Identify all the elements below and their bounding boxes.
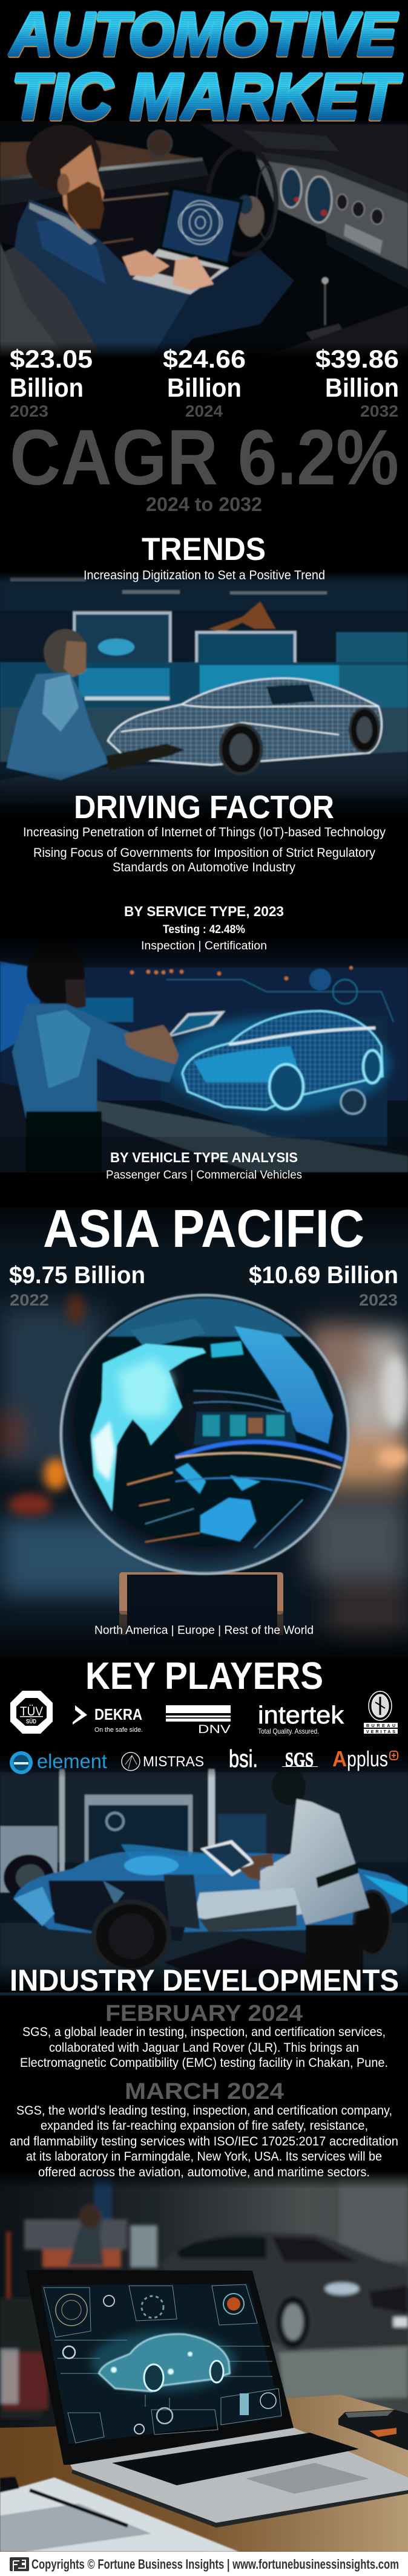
image: engineer with holographic car [0, 937, 408, 1173]
other regions: North America | Europe | Rest of the World [94, 1624, 314, 1637]
image: mechanic with laptop in car interior [0, 121, 408, 358]
image: engineer inspecting car chassis [0, 1754, 408, 1995]
floor [0, 1923, 408, 1995]
segment: by service type: BY SERVICE TYPE, 2023 [124, 903, 284, 919]
development: March 2024: expanded its far-reaching expansion of fire safety, resistance, [41, 2119, 368, 2133]
logo: MISTRAS: MISTRAS [143, 1754, 204, 1770]
stat: 2023 market size: $23.05 [10, 345, 93, 373]
development: February 2024: FEBRUARY 2024 [105, 2001, 303, 2026]
heading: trends: TRENDS [142, 532, 266, 567]
laptop [159, 186, 243, 268]
segment: by vehicle type: Passenger Cars | Commercial Vehicles [106, 1169, 302, 1182]
car wireframe [108, 678, 381, 765]
stand [119, 1572, 283, 1635]
logo: DNV [166, 1705, 231, 1736]
stat: 2023 market size: Billion [10, 373, 84, 403]
logo: intertek: Total Quality. Assured. [258, 1727, 319, 1735]
logo: TUV SUD: SÜD [26, 1717, 36, 1725]
title: TIC MARKET [12, 61, 401, 134]
logo: intertek: intertek [258, 1701, 344, 1729]
logos: key players [10, 1691, 398, 1774]
image: laptop with car diagnostics in workshop [0, 2171, 408, 2552]
stat: 2032 market size [315, 345, 399, 420]
laptop screen [26, 2270, 294, 2465]
stat: 2024 market size [163, 345, 246, 420]
title: TIC MARKET [12, 60, 402, 132]
segment: by vehicle type: BY VEHICLE TYPE ANALYSIS [110, 1150, 298, 1165]
development: March 2024: and flammability testing services with ISO/IEC 17025:2017 accreditation [10, 2135, 398, 2148]
man [272, 1769, 306, 1805]
paper and pen [0, 2477, 239, 2552]
stat: asia pacific 2023 [249, 1262, 398, 1309]
logo: DNV: DNV [198, 1723, 231, 1736]
desk [0, 1082, 408, 1173]
development: March 2024 [10, 2079, 398, 2179]
car on screen [91, 2331, 236, 2392]
segment: by service type: Testing : 42.48% [163, 923, 245, 936]
logo: DEKRA [73, 1705, 143, 1734]
development: March 2024: MARCH 2024 [125, 2079, 284, 2104]
stat: asia pacific 2022: 2022 [10, 1291, 49, 1309]
table [0, 2395, 408, 2552]
dashboard [256, 158, 408, 269]
logo: DEKRA: On the safe side. [94, 1726, 143, 1734]
man jacket [15, 200, 190, 358]
driving factor text: Rising Focus of Governments for Imposition of Strict Regulatory [33, 846, 375, 860]
development: February 2024: collaborated with Jaguar Land Rover (JLR). This brings an [49, 2041, 359, 2055]
development: February 2024 [20, 2001, 388, 2070]
title: TIC MARKET [12, 60, 402, 132]
stat: 2032 market size: 2032 [360, 402, 398, 420]
development: March 2024: SGS, the world's leading testing, inspection, and certification company, [16, 2104, 392, 2118]
logo: bsi: bsi. [229, 1746, 258, 1772]
logo: Applus: pplus [347, 1746, 388, 1771]
driving factor text: Increasing Penetration of Internet of Things (IoT)-based Technology [23, 825, 386, 839]
seat [4, 246, 100, 356]
image: engineer and wireframe car in lab [0, 571, 408, 819]
icon: Fortune Business Insights logo [10, 2557, 29, 2571]
stat: 2032 market size: $39.86 [315, 345, 399, 373]
car [13, 1852, 408, 1935]
heading: driving factor: DRIVING FACTOR [74, 789, 334, 825]
jeans [151, 250, 294, 358]
development: March 2024: at its laboratory in Farmingdale, New York, USA. Its services will be [26, 2150, 382, 2164]
logo: element: element [37, 1750, 107, 1772]
head [26, 125, 101, 192]
tablet [166, 1011, 225, 1038]
development: March 2024: offered across the aviation, automotive, and maritime sectors. [38, 2165, 370, 2179]
logo: MISTRAS [122, 1752, 204, 1771]
segment: by service type [124, 903, 284, 952]
stat: asia pacific 2022 [9, 1262, 145, 1309]
stat: 2032 market size: Billion [325, 373, 399, 403]
stat: 2024 market size: $24.66 [163, 345, 246, 373]
man [44, 629, 87, 675]
calculator [338, 2410, 408, 2450]
logo: Bureau Veritas [364, 1691, 398, 1734]
logo: element [10, 1750, 107, 1774]
car [160, 2231, 408, 2349]
stat: 2024 market size: Billion [167, 373, 242, 403]
globe [61, 1294, 349, 1574]
logo: Applus: A [332, 1746, 347, 1771]
title: AUTOMOTIVE [8, 0, 398, 68]
stat: 2024 market size: 2024 [185, 402, 223, 420]
steering wheel [208, 147, 276, 255]
title: AUTOMOTIVE [8, 0, 398, 68]
segment: by vehicle type [106, 1150, 302, 1182]
logo: DEKRA: DEKRA [94, 1705, 142, 1723]
heading: key players: KEY PLAYERS [85, 1655, 323, 1697]
trend text: Increasing Digitization to Set a Positive Trend [84, 568, 325, 582]
segment: by service type: Inspection | Certification [141, 940, 267, 952]
hologram panel [160, 1016, 387, 1146]
logo: Bureau Veritas: BUREAU [366, 1724, 395, 1728]
driving factor text: Standards on Automotive Industry [113, 860, 295, 874]
laptop base [70, 2428, 408, 2528]
footer bar [0, 2552, 408, 2576]
logo: SGS: SGS [285, 1749, 314, 1771]
car hologram [166, 1016, 390, 1113]
logo: Bureau Veritas: VERITAS [366, 1730, 395, 1734]
title: AUTOMOTIVE [9, 1, 398, 69]
wheels [94, 1902, 169, 1971]
platform [0, 751, 408, 791]
stat: asia pacific 2022: $9.75 Billion [9, 1262, 145, 1289]
image: holographic globe [0, 1207, 408, 1659]
driving factor text [23, 825, 386, 874]
man [25, 951, 85, 1004]
title [8, 0, 402, 134]
development: February 2024: SGS, a global leader in testing, inspection, and certification services, [22, 2025, 386, 2039]
stat: asia pacific 2023: $10.69 Billion [249, 1262, 398, 1289]
development: February 2024: Electromagnetic Compatibility (EMC) testing facility in Chakan, Pune. [20, 2056, 388, 2070]
stat: 2023 market size [10, 345, 93, 420]
stat: asia pacific 2023: 2023 [359, 1291, 398, 1309]
gear stick [324, 284, 326, 325]
stat: 2023 market size: 2023 [10, 402, 48, 420]
heading: asia pacific: ASIA PACIFIC [43, 1199, 364, 1258]
logo: TUV SUD [10, 1691, 53, 1734]
CAGR period: 2024 to 2032 [146, 493, 262, 515]
logo: TUV SUD: TÜV [20, 1705, 43, 1719]
land: Asia and Africa [91, 1344, 206, 1511]
